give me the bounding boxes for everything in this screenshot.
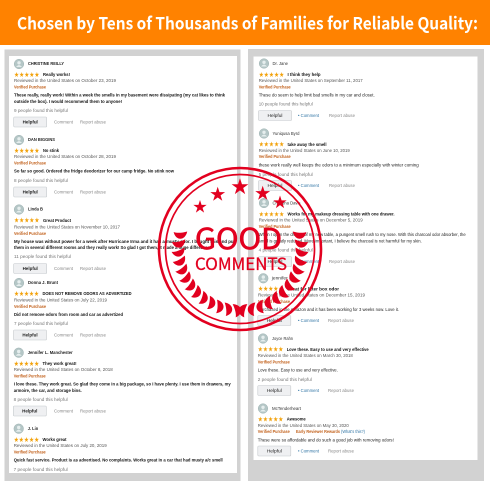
review: Christina Davis: Works for my makeup dressing table with one drawer. [288,212,394,217]
review: Linda B: Verified Purchase [14,231,46,236]
review: Yunigusa Byrd: take away the smell [288,142,326,147]
review: jennifer g: Helpful [267,318,282,324]
review: Christine Reilly: 9 people found this helpful [14,108,68,113]
stamp stars [193,178,287,213]
review: jennifer g: ★★★★★ [258,285,284,293]
review: Yunigusa Byrd: • Comment [298,183,320,188]
review: Joyce Rahn [258,334,369,396]
review: McTenderheart: ★★★★★ [258,415,283,423]
review: jennifer g: Reviewed in the United States on December 15, 2019 [258,293,365,298]
review: Jennifer L. Manchester [13,348,231,416]
review: J. Lin: Quick fast service. Product is as advertised. No complaints. Works great in a car that had musty a/c smell [14,458,223,463]
review: Dan Biggins: No stink [43,148,59,153]
review: Yunigusa Byrd: ★★★★★ [259,141,284,149]
review: Christina Davis: Helpful [268,259,282,265]
review: Dr. Jane: Reviewed in the United States on September 11, 2017 [259,78,363,83]
review: Christina Davis: Reviewed in the United States on December 5, 2019 [259,218,363,223]
review: Christine Reilly: CHRISTINE REILLY [28,61,64,66]
review: J. Lin [14,424,223,472]
review: J. Lin: J. Lin [28,426,39,431]
review: Christina Davis: Christina Davis [272,200,301,205]
review: McTenderheart: • Comment [298,449,320,454]
review: Joyce Rahn: Report abuse [328,388,354,393]
review: Linda B: Report abuse [80,266,106,271]
review: McTenderheart: Early Reviewer Rewards [296,429,340,434]
stamp text: COMMENTS: COMMENTS [195,251,287,275]
review: Donna J. Brunt: Reviewed in the United States on July 22, 2019 [14,298,107,303]
review: Jennifer L. Manchester: Report abuse [80,409,106,414]
stamp laurel wreath [171,228,309,318]
review: Christina Davis: Verified Purchase [259,224,291,229]
review: Jennifer L. Manchester: ★★★★★ [14,360,39,368]
review: jennifer g [258,274,399,326]
stamp text: GOOD: GOOD [195,217,282,258]
review: Yunigusa Byrd: 5 people found this helpful [259,172,313,177]
review: Linda B: Comment [54,266,74,271]
review: Linda B: 11 people found this helpful [14,254,71,259]
review: Jennifer L. Manchester: 8 people found this helpful [14,397,68,402]
review: Christine Reilly: outside the box). I would recommend them to anyone! [14,99,122,104]
review: Joyce Rahn: Joyce Rahn [272,336,294,341]
review: Joyce Rahn: 2 people found this helpful [258,377,312,382]
review: J. Lin: 7 people found this helpful [14,467,68,472]
review: Donna J. Brunt: Verified Purchase [14,304,46,309]
review: Dan Biggins: So far so good. Ordered the fridge deodorizer for our camp fridge. No stink now [14,169,174,174]
review: Christina Davis: • Comment [298,259,320,264]
review: Joyce Rahn: Reviewed in the United States on March 30, 2018 [258,353,353,358]
review: Christine Reilly [14,59,225,127]
review: Dr. Jane: Report abuse [329,113,355,118]
review: Dan Biggins: Report abuse [80,190,106,195]
review: Donna J. Brunt: DOES NOT REMOVE ODORS AS ADVERTIZED [42,291,132,296]
review: Dr. Jane: ★★★★★ [259,71,284,79]
review: jennifer g: Verified Purchase [258,299,290,304]
review: Joyce Rahn: Helpful [267,388,282,394]
review: McTenderheart: These were so affordable and do such a good job with removing odors! [258,438,394,443]
review: Donna J. Brunt: Did not remove odors from room and car as advertized [14,312,123,317]
review: Yunigusa Byrd: Report abuse [329,183,355,188]
review: Christine Reilly: Verified Purchase [14,85,46,90]
review: Donna J. Brunt: Donna J. Brunt [28,280,59,285]
review: McTenderheart: Report abuse [328,449,354,454]
review: Christina Davis: ★★★★★ [259,210,284,218]
review: Donna J. Brunt [14,278,132,340]
review: Dan Biggins [14,135,174,197]
review: Donna J. Brunt: Comment [54,332,74,337]
stamp: good comments [159,168,321,330]
header banner [0,0,490,45]
review: Joyce Rahn: Love these. Easy to use and very effective. [258,367,338,372]
review: Dr. Jane: Verified Purchase [259,85,291,90]
review: Christine Reilly: Report abuse [80,120,106,125]
panel: left reviews [4,50,240,481]
review: Yunigusa Byrd: Verified Purchase [259,154,291,159]
review: J. Lin: Verified Purchase [14,449,46,454]
review: Linda B: Reviewed in the United States on November 10, 2017 [14,225,120,230]
review: McTenderheart: Reviewed in the United States on May 30, 2020 [258,423,349,428]
review: Jennifer L. Manchester: I love these. They work great. So glad they come in a big package, so I have plenty. I use them in drawers, my [14,382,231,387]
review: Yunigusa Byrd: Helpful [268,183,282,189]
review: Christina Davis: smell is greatly reduced. More important, I believe the charcoal is not harmful for my skin. [259,238,422,243]
review: Yunigusa Byrd: these work really well keeps the odors to a minimum especially with winter coming [259,163,419,168]
review: Dr. Jane: These do seem to help limit bad smells in my car and closet. [259,93,375,98]
review: Christine Reilly: Really works! [43,72,70,77]
review: jennifer g: • Comment [298,318,320,323]
review: Joyce Rahn: Verified Purchase [258,359,290,364]
review: Dr. Jane: Dr. Jane [272,61,289,66]
review: Jennifer L. Manchester: Reviewed in the United States on October 8, 2018 [14,367,113,372]
review: Yunigusa Byrd: Yuniqusa Byrd [272,131,300,136]
review: Jennifer L. Manchester: They work great! [42,361,77,366]
review: Dr. Jane: I think they help [288,72,321,77]
review: Christine Reilly: Reviewed in the United States on October 23, 2019 [14,78,116,83]
review: McTenderheart: Helpful [267,449,282,455]
review: Dr. Jane: Helpful [268,113,282,119]
review: Dan Biggins: Reviewed in the United States on October 28, 2019 [14,154,116,159]
review: Joyce Rahn: Love these. Easy to use and very effective [287,347,369,352]
review: Linda B: Linda B [28,207,43,212]
review: Joyce Rahn: • Comment [298,388,320,393]
review: Donna J. Brunt: Helpful [22,332,38,337]
review: Dan Biggins: Verified Purchase [14,161,46,166]
review: McTenderheart: McTenderheart [272,406,302,411]
review: Dan Biggins: Helpful [23,190,38,195]
review: Christine Reilly: These really, really work! Within a week the smells in my basement were dissipating (my cat likes to think [14,93,225,98]
review: Joyce Rahn: ★★★★★ [258,346,283,354]
review: Dr. Jane: • Comment [298,113,320,118]
review: Jennifer L. Manchester: Comment [54,409,74,414]
review: J. Lin: ★★★★★ [14,436,39,444]
review: Dan Biggins: 8 people found this helpful [14,178,68,183]
panel: right reviews [248,49,484,481]
review: Donna J. Brunt: ★★★★★ [14,290,39,298]
review: Linda B: Great Product [43,218,71,223]
review: Dr. Jane: 10 people found this helpful [259,102,313,107]
review: Dan Biggins: ★★★★★ [14,147,40,155]
review: jennifer g: Purchased in the Amazon and it has been working for 3 weeks now. Love it. [258,307,399,312]
review: McTenderheart: Awesome [287,417,306,422]
review: McTenderheart: (What's this?) [341,429,365,434]
review: Donna J. Brunt: Report abuse [80,332,106,337]
review: Yunigusa Byrd: Reviewed in the United States on June 10, 2019 [259,148,350,153]
review: McTenderheart [258,404,394,456]
review: Linda B: Helpful [23,266,38,271]
review: jennifer g: jennifer g [271,276,292,281]
review: Yunigusa Byrd [258,129,419,190]
review: Dan Biggins: DAN BIGGINS [28,137,55,142]
review: Christina Davis [258,198,466,266]
review: Christina Davis: 4 people found this helpful [259,248,313,253]
review: Linda B [14,205,235,274]
review: Linda B: ★★★★★ [14,217,40,225]
review: McTenderheart: Verified Purchase [258,429,290,434]
review: Christina Davis: Report abuse [329,259,355,264]
review: Linda B: them in several different rooms and they really work! So glad I got them, it made a huge difference. [14,245,211,250]
review: Christine Reilly: Helpful [23,120,38,125]
review: jennifer g: Great for litter box odor [287,286,339,291]
review: Christine Reilly: Comment [54,120,74,125]
review: J. Lin: Works great [42,437,67,442]
review: Jennifer L. Manchester: Helpful [22,409,37,414]
review: Christina Davis: When I open the drawer of my new table, a pungent smell rush to my nose. With this charcoal odor absorber, the [259,232,466,237]
review: Jennifer L. Manchester: Jennifer L. Manchester [28,350,73,355]
review: J. Lin: Reviewed in the United States on July 20, 2019 [14,443,107,448]
review: Jennifer L. Manchester: armoire, the car, and storage bins. [14,388,82,393]
review: Linda B: My house was without power for a week after Hurricane Irma and it had a musty odor. I bought this and put [14,239,235,244]
review: Jennifer L. Manchester: Verified Purchase [14,373,46,378]
review: Donna J. Brunt: 7 people found this helpful [14,321,68,326]
review: Dr. Jane [258,59,375,120]
review: Christine Reilly: ★★★★★ [14,71,40,79]
review: jennifer g: Report abuse [328,318,354,323]
review: Dan Biggins: Comment [54,190,74,195]
